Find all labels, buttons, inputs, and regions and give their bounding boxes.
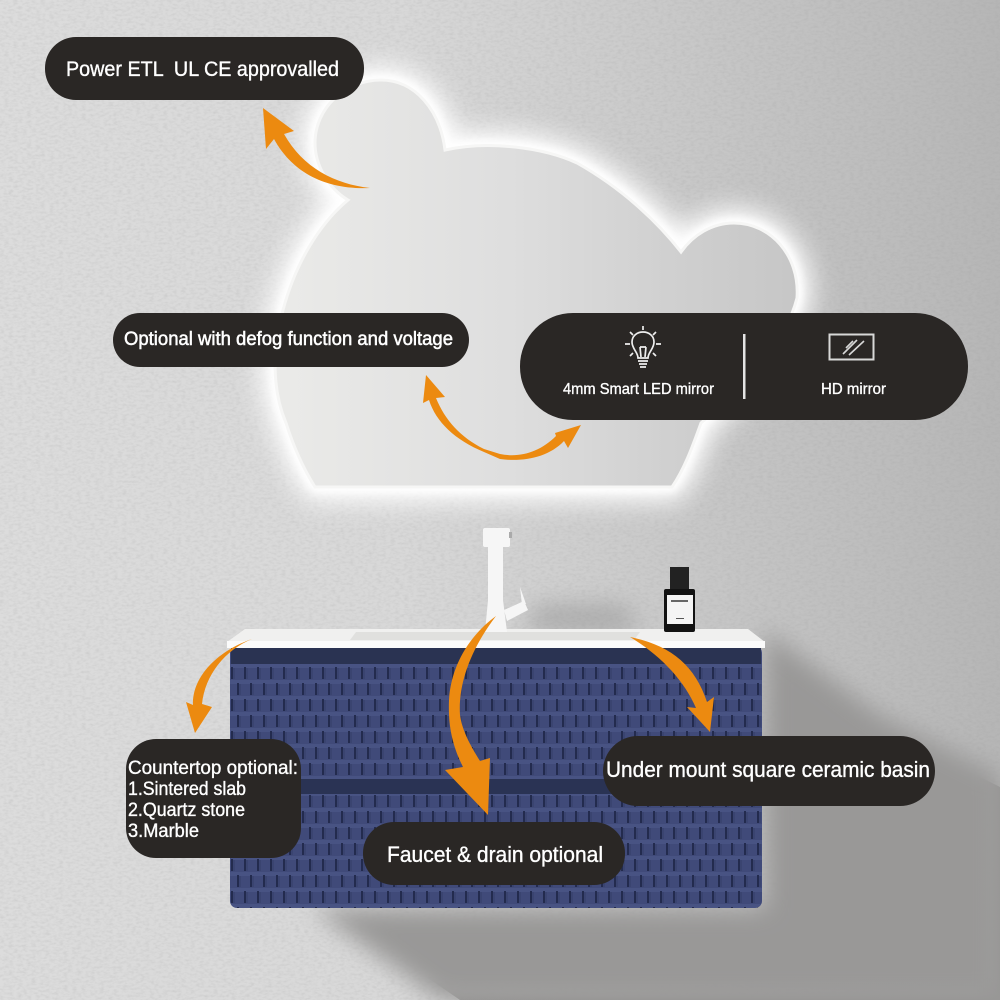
label: countertop options: 1.Sintered slab [128, 779, 246, 800]
label: power approval: Power ETL UL CE approvalled [66, 57, 339, 81]
panel: mirror features [520, 313, 968, 420]
countertop slab [227, 629, 765, 648]
cabinet upper dark band [231, 648, 761, 664]
label: countertop options: Countertop optional: [128, 758, 298, 779]
cabinet drawer gap [231, 779, 761, 794]
label: basin [603, 736, 935, 806]
arrow: between defog label and LED mirror label [423, 375, 581, 460]
label: faucet and drain [363, 822, 625, 885]
label: countertop options: 2.Quartz stone [128, 800, 245, 821]
icon: light bulb [625, 326, 661, 367]
arrow: to basin label [630, 637, 714, 732]
arrow: to faucet and drain label [445, 616, 496, 815]
soap bottle [664, 567, 695, 632]
label: defog option [113, 313, 469, 367]
LED mirror caption: 4mm Smart LED mirror [563, 381, 714, 398]
label: countertop options [126, 739, 301, 858]
label: basin: Under mount square ceramic basin [606, 757, 930, 782]
arrow: to power approval label [263, 108, 370, 188]
mirror: bear-shaped backlit LED mirror [275, 80, 797, 487]
icon: HD mirror [830, 334, 874, 360]
label: defog option: Optional with defog function and voltage [124, 329, 453, 350]
divider [743, 334, 746, 399]
vanity cabinet [230, 646, 762, 908]
arrow: to countertop label [186, 639, 252, 733]
label: power approval [45, 37, 364, 100]
label: faucet and drain: Faucet & drain optional [387, 842, 603, 867]
faucet [483, 528, 528, 632]
vanity wall shadow [312, 605, 1000, 1000]
label: countertop options: 3.Marble [128, 821, 199, 842]
HD mirror caption: HD mirror [821, 381, 886, 398]
